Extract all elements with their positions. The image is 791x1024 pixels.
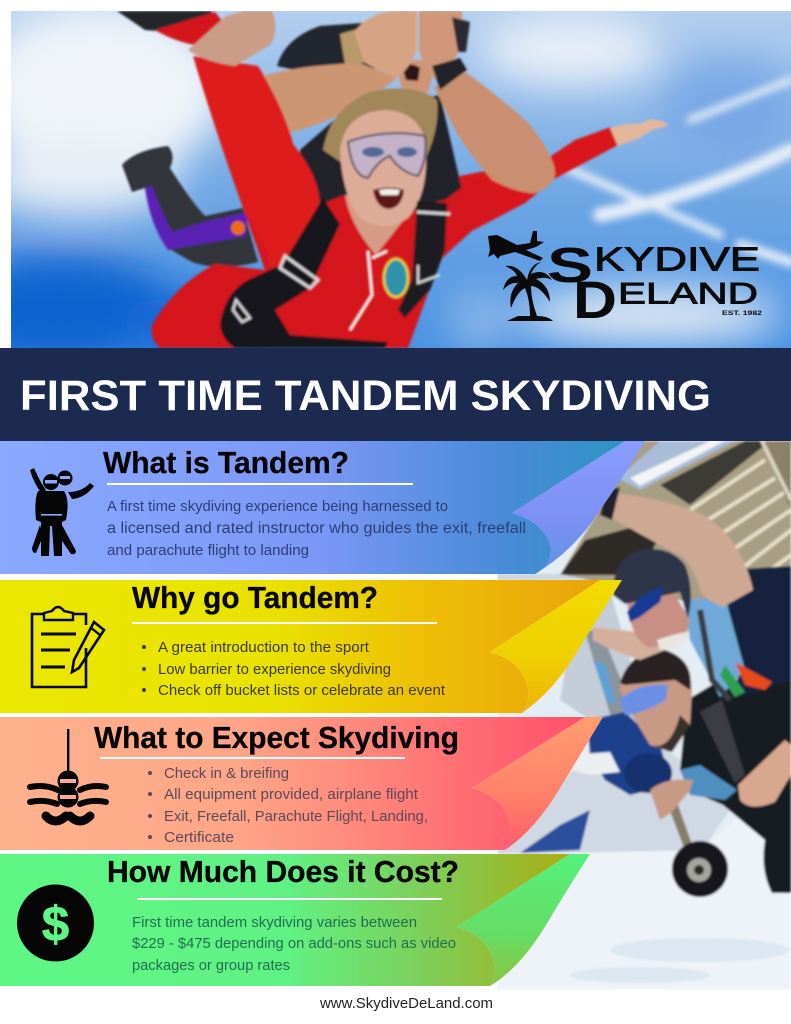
panel: what to expect	[0, 717, 603, 850]
heading: How Much Does it Cost?	[107, 854, 459, 889]
harness behind student	[298, 94, 463, 214]
right red arm	[457, 126, 619, 232]
instructor hands and face	[398, 60, 432, 95]
panel: how much does it cost	[0, 854, 590, 986]
man 2 body	[680, 680, 791, 893]
hair strands behind	[338, 28, 366, 65]
logo: Skydive Deland: EST. 1982	[722, 310, 763, 317]
harness straps	[283, 198, 340, 288]
plane door interior	[562, 441, 791, 608]
mouth	[373, 188, 404, 209]
page fold	[512, 441, 645, 574]
icon: dollar coin: $	[42, 898, 69, 952]
bullet list: All equipment provided, airplane flight	[164, 786, 419, 803]
man 1 body	[723, 566, 791, 697]
hero photo: tandem skydivers in blue sky	[0, 5, 791, 365]
body text: A first time skydiving experience being harnessed to	[107, 498, 448, 515]
logo: Skydive Deland: ELAND	[618, 278, 758, 310]
cirrus streaks	[560, 80, 791, 262]
logo: Skydive Deland	[488, 231, 763, 330]
student torso	[150, 187, 472, 348]
bullet list: Low barrier to experience skydiving	[158, 661, 391, 678]
heading: What to Expect Skydiving	[94, 720, 459, 755]
title banner	[0, 348, 791, 441]
man 2 head	[618, 678, 694, 752]
heading: Why go Tandem?	[132, 580, 378, 615]
goggles	[348, 133, 426, 178]
wordmark: S	[547, 239, 593, 293]
student leg	[122, 146, 258, 267]
man 1 face	[627, 590, 690, 648]
photo: skydivers exiting plane	[497, 441, 791, 990]
patch	[384, 259, 408, 297]
icon: tandem skydivers	[30, 468, 94, 556]
bullet list: Check off bucket lists or celebrate an event	[158, 682, 446, 699]
hair	[323, 88, 438, 165]
title: FIRST TIME TANDEM SKYDIVING	[20, 372, 711, 420]
page fold	[472, 717, 603, 850]
heading: What is Tandem?	[103, 445, 349, 480]
tandem pair	[117, 11, 668, 348]
wheel	[670, 804, 692, 848]
icon: freefall pair	[30, 729, 106, 821]
bullet list: Check in & breifing	[164, 765, 289, 782]
man 1 arm	[610, 493, 753, 607]
logo: Skydive Deland: KYDIVE	[594, 240, 760, 278]
bullet list	[148, 765, 428, 846]
man 2 arm	[738, 740, 791, 807]
man 1 helmet	[613, 549, 691, 618]
body text	[132, 914, 456, 974]
icon: clipboard	[32, 607, 104, 687]
icon: palm tree	[503, 262, 553, 321]
body text: First time tandem skydiving varies between	[132, 914, 417, 931]
icon: plane	[488, 231, 544, 261]
body text: packages or group rates	[132, 957, 290, 974]
student glove and cuff	[117, 11, 212, 32]
footer website: www.SkydiveDeLand.com	[319, 996, 493, 1012]
panel: what is tandem	[0, 441, 645, 574]
clouds	[497, 815, 791, 990]
fuselage side with window	[560, 596, 635, 720]
bullet list: A great introduction to the sport	[158, 639, 370, 656]
student raised arm	[193, 56, 320, 270]
body text: $229 - $475 depending on add-ons such as video	[132, 935, 456, 952]
page fold	[490, 580, 622, 713]
bullet list	[142, 639, 446, 699]
icon: dollar coin	[17, 884, 94, 962]
plane lower fuselage	[498, 748, 730, 853]
instructor rig behind	[277, 23, 375, 78]
bullet list: Exit, Freefall, Parachute Flight, Landing,	[164, 808, 428, 825]
neck	[345, 195, 410, 255]
instructor right arm	[434, 72, 555, 193]
panel: why go tandem	[0, 580, 622, 713]
body text	[107, 498, 526, 559]
orange handle	[231, 221, 245, 235]
sky with clouds	[0, 5, 791, 365]
zipper	[350, 251, 387, 330]
body text: and parachute flight to landing	[107, 542, 309, 559]
instructor left arm	[263, 63, 397, 134]
page fold	[457, 854, 590, 986]
face	[340, 110, 426, 226]
bullet list: Certificate	[164, 829, 234, 846]
logo: Skydive Deland: D	[573, 271, 617, 330]
body text: a licensed and rated instructor who guides the exit, freefall	[107, 520, 526, 537]
